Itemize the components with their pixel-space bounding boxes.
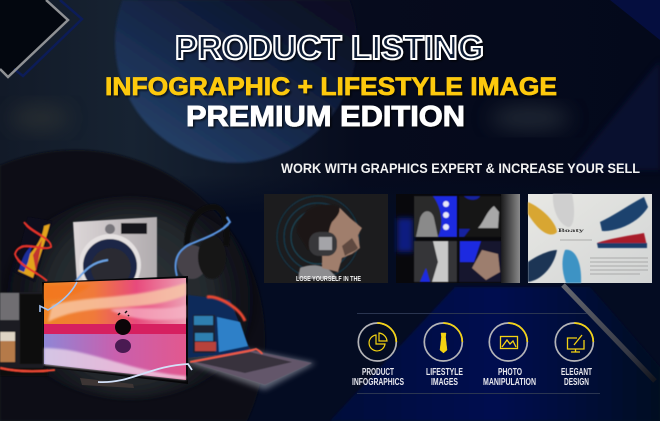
label: ELEGANT (561, 367, 592, 378)
panel: sample images (264, 194, 652, 283)
label (561, 367, 592, 388)
panel: product group (0, 198, 316, 398)
heading: product listing: PRODUCT LISTING (175, 29, 484, 66)
icon: headphones (175, 207, 230, 279)
title (105, 29, 557, 133)
feature: lifestyle images (424, 323, 463, 388)
label (352, 367, 404, 388)
label: LIFESTYLE (426, 367, 463, 378)
subtitle: WORK WITH GRAPHICS EXPERT & INCREASE YOUR SELL (281, 161, 640, 176)
heading: infographic + lifestyle image: INFOGRAPHIC + LIFESTYLE IMAGE (105, 73, 557, 101)
label: PHOTO (498, 367, 522, 378)
feature: elegant design (555, 323, 593, 388)
label: DESIGN (564, 377, 589, 388)
icon: washing machine (73, 217, 157, 296)
backdrop glow (0, 198, 260, 398)
label (483, 367, 536, 388)
label: IMAGES (431, 377, 458, 388)
icon: picture (500, 336, 518, 348)
icon: phone (14, 217, 52, 282)
caption: lose yourself in the: LOSE YOURSELF IN THE (296, 274, 361, 283)
icon: television (40, 276, 192, 388)
image: shoes catalog (528, 194, 652, 283)
icon: laptop (186, 295, 316, 390)
heading: premium edition: PREMIUM EDITION (186, 101, 465, 133)
icon: pie chart (369, 333, 387, 351)
panel: features (352, 323, 593, 388)
label: PRODUCT (362, 367, 394, 378)
feature: photo manipulation (483, 323, 536, 388)
label: INFOGRAPHICS (352, 377, 404, 388)
label: MANIPULATION (483, 377, 536, 388)
caption: shoe catalog title: Boaty (558, 229, 585, 234)
image: blue fitness collage (396, 194, 520, 283)
feature: product infographics (352, 323, 404, 388)
icon: coffee machine (0, 292, 55, 376)
image: headphones man (264, 194, 388, 283)
icon: necktie (440, 333, 447, 353)
icon: monitor with pen (568, 335, 584, 352)
decorative stripe: bottom right (563, 285, 655, 381)
decorative frame: top left (0, 0, 82, 77)
label (426, 367, 463, 388)
